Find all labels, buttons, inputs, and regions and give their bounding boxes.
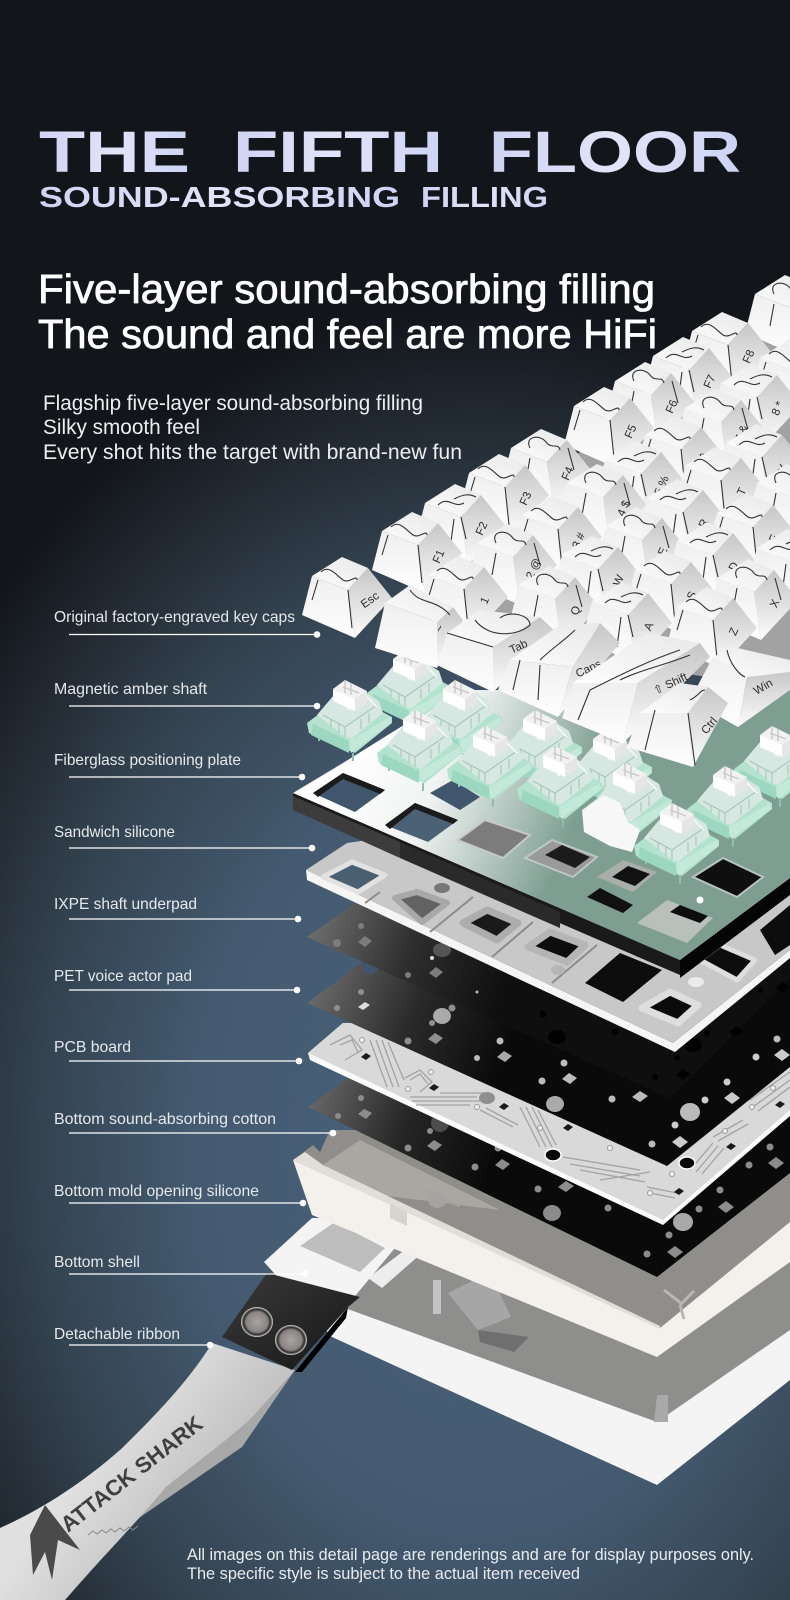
keycaps: T xyxy=(735,486,749,497)
keycaps: F xyxy=(767,533,781,544)
keycaps: F2 xyxy=(474,520,490,537)
keycaps: R xyxy=(697,518,711,530)
keycap: Esc: Esc xyxy=(359,590,382,611)
description: Flagship five-layer sound-absorbing filling xyxy=(43,392,423,415)
keycaps: F6 xyxy=(664,398,680,415)
keycaps: A xyxy=(642,621,656,633)
PCB board xyxy=(308,1023,790,1225)
title: THE xyxy=(39,120,190,185)
magnetic amber switches xyxy=(307,650,790,884)
stabilizer xyxy=(582,795,640,852)
heading xyxy=(38,266,657,357)
bottom mold opening silicone xyxy=(293,1130,790,1357)
footer note: The specific style is subject to the actual item received xyxy=(187,1565,580,1583)
keycaps: F1 xyxy=(431,548,447,565)
PET voice actor pad xyxy=(307,930,790,1166)
label: plate xyxy=(54,752,305,780)
keycaps: F8 xyxy=(741,348,757,365)
subtitle: SOUND-ABSORBING xyxy=(39,182,400,214)
keycaps: F3 xyxy=(518,490,534,507)
keycap: Esc xyxy=(302,557,392,638)
IXPE shaft underpad xyxy=(307,880,790,1098)
keycaps: E xyxy=(656,546,670,558)
label: plate: Fiberglass positioning plate xyxy=(54,752,241,769)
ribbon xyxy=(0,1343,295,1600)
keycaps: 5 % xyxy=(653,474,672,497)
label: PET xyxy=(54,968,300,993)
keycaps: Q xyxy=(569,604,584,617)
label: IXPE xyxy=(54,896,301,922)
heading: The sound and feel are more HiFi xyxy=(38,311,657,357)
label: mold xyxy=(54,1183,306,1206)
label: sandwich: Sandwich silicone xyxy=(54,824,175,841)
title: FLOOR xyxy=(489,120,741,185)
title xyxy=(39,120,741,185)
keycaps: 7 & xyxy=(733,423,751,444)
keycaps: Y xyxy=(776,463,790,475)
heading: Five-layer sound-absorbing filling xyxy=(38,266,655,312)
ribbon brand text: ATTACK SHARK xyxy=(56,1411,207,1537)
keycaps: 3 # xyxy=(571,530,588,551)
keycap: Caps: Caps xyxy=(574,658,604,680)
keycaps: Z xyxy=(727,626,741,637)
keycap: Shift: ⇧ Shift xyxy=(652,670,690,697)
keycaps: 6 ^ xyxy=(694,451,711,470)
keycaps: D xyxy=(727,561,741,573)
label: mold: Bottom mold opening silicone xyxy=(54,1183,259,1200)
bottom sound-absorbing cotton xyxy=(308,1062,790,1277)
label: shaft: Magnetic amber shaft xyxy=(54,681,208,698)
label: sandwich xyxy=(54,824,315,851)
footer note: All images on this detail page are renderings and are for display purposes only. xyxy=(187,1546,754,1564)
keycap: Win: Win xyxy=(752,677,775,698)
keycaps: S xyxy=(685,590,699,602)
label: PCB: PCB board xyxy=(54,1039,131,1056)
label: PET: PET voice actor pad xyxy=(54,968,192,985)
callout labels xyxy=(54,609,336,1348)
title: FIFTH xyxy=(233,120,443,185)
description: Silky smooth feel xyxy=(43,416,200,439)
keycaps xyxy=(302,275,790,767)
label: key caps: Original factory-engraved key caps xyxy=(54,609,295,626)
sandwich silicone xyxy=(306,780,790,1052)
keycaps: 4 $ xyxy=(616,498,633,519)
label: cotton: Bottom sound-absorbing cotton xyxy=(54,1111,276,1128)
keycap: tilde xyxy=(375,585,463,668)
keycap: Caps xyxy=(498,623,620,717)
keycaps: W xyxy=(612,573,627,588)
fiberglass positioning plate xyxy=(293,690,790,978)
subtitle: FILLING xyxy=(421,182,548,214)
label: ribbon: Detachable ribbon xyxy=(54,1326,180,1343)
label: shaft xyxy=(54,681,320,709)
keycap: Shift xyxy=(562,633,710,743)
keycaps: 8 * xyxy=(770,399,787,418)
keycap: tilde: ~ xyxy=(433,623,447,634)
keycap: Ctrl: Ctrl xyxy=(699,715,720,737)
label: shell xyxy=(54,1254,308,1277)
keycaps: F4 xyxy=(560,465,577,482)
keycap: Win xyxy=(690,647,790,727)
label: shell: Bottom shell xyxy=(54,1254,140,1271)
bottom shell xyxy=(264,1218,790,1485)
description: Every shot hits the target with brand-new fun xyxy=(43,441,462,464)
keycaps: F7 xyxy=(702,373,718,390)
label: PCB xyxy=(54,1039,302,1064)
keycap: Tab xyxy=(437,610,557,692)
keycaps: 1 xyxy=(478,595,492,606)
label: IXPE: IXPE shaft underpad xyxy=(54,896,197,913)
label: ribbon xyxy=(54,1326,213,1348)
keycaps: 2 @ xyxy=(524,557,544,581)
description xyxy=(43,392,462,464)
brand logo xyxy=(30,1505,80,1580)
ribbon clasp xyxy=(222,1273,360,1372)
keycap: Tab: Tab xyxy=(508,638,530,657)
keycap: Ctrl xyxy=(627,683,728,767)
label: cotton xyxy=(54,1111,336,1136)
keycaps: F5 xyxy=(623,423,639,440)
label: key caps xyxy=(54,609,320,638)
keycaps: X xyxy=(768,598,782,610)
subtitle xyxy=(39,182,548,214)
footer note xyxy=(187,1546,754,1583)
